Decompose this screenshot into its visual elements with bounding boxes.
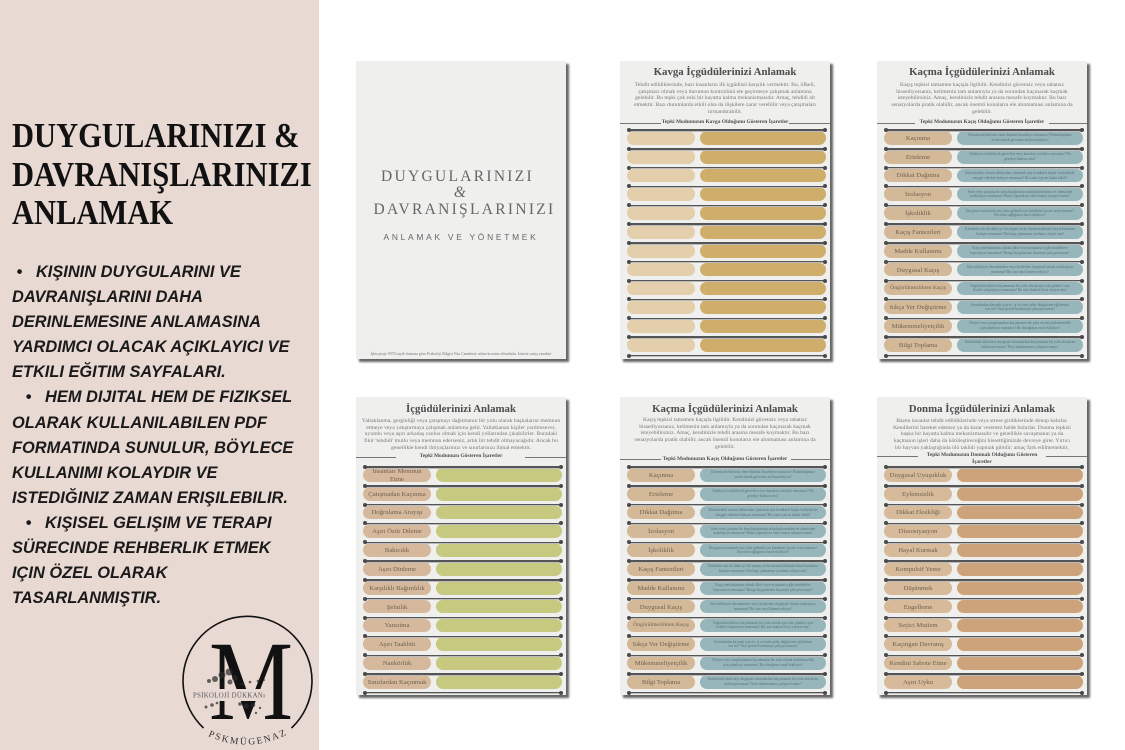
worksheet rows: Duygusal Kaçış — [897, 267, 939, 274]
intro text: Kendilerini hareket edemez ya da karar veremez halde bulurlar. Donma tepkisi — [893, 425, 1071, 431]
worksheet rows: uzaklaşıyor musunuz? Bunu yaparak ne elde etmeyi umuyorsunuz? — [970, 194, 1070, 198]
intro text: gelebilir. — [715, 444, 735, 450]
worksheet rows — [363, 465, 563, 695]
worksheet rows: Bilgi Toplama — [642, 679, 680, 686]
intro text: Tehdit edildiklerinde, bazı insanların ilk içgüdüsü karşılık vermektir. Bu, öfkeli, — [635, 82, 815, 88]
divider heading: Tepki Modunuzun Donmak Olduğunu Gösteren — [927, 452, 1037, 458]
worksheet rows: Düşünmek — [904, 585, 932, 592]
logo flowers — [204, 668, 265, 714]
cover title: DUYGULARINIZI — [381, 168, 534, 184]
left panel — [0, 0, 319, 750]
worksheet rows: Öngörülmezlikten Kaçış — [633, 622, 689, 628]
bullet list: SÜRECINDE REHBERLIK ETMEK — [12, 539, 271, 557]
worksheet rows: Duygusal sorunlarla yüz yüze gelmek için kendinizi işe mi veriyorsunuz? — [709, 546, 817, 550]
main title: DUYGULARINIZI & — [12, 117, 300, 155]
worksheet rows: Dissosiyasyon — [899, 528, 937, 535]
worksheet rows: musunuz? Bu size nasıl hizmet ediyor? — [734, 607, 792, 611]
cover title: & — [454, 184, 468, 201]
logo band — [190, 689, 266, 701]
intro text: çatışmacı olmak veya durumun kontrolünü ele geçirmeye çalışmak anlamına — [638, 89, 812, 95]
worksheet rows: meşgul ederken buluyor musunuz? Bu sizin için ne kadar etkili? — [973, 176, 1067, 180]
worksheet rows: Aşırı Dinleme — [378, 566, 416, 573]
cover footer: İşbu proje 5070 sayılı kanuna göre Psikoloji Bilgisi Nur Candemir adına koruma altındadır. İzinsiz satışı yasaktır — [371, 350, 551, 356]
worksheet rows: Dikkat Dağıtma — [640, 509, 682, 516]
worksheet rows: kullanıyorsunuz? Neyi atlatmamaya çalışıyorsunuz? — [724, 682, 802, 686]
worksheet rows: Kaçınma — [649, 472, 673, 479]
worksheet rows: Aşırı Taahhüt — [379, 641, 415, 648]
worksheet rows: Duygusal Kaçış — [640, 604, 682, 611]
intro text: Yaltaklanma, gerginliği veya çatışmayı dağıtmanın bir yolu olarak başkalarını memnun — [362, 418, 560, 424]
worksheet rows: Doğrulama Arayışı — [371, 509, 423, 516]
logo ring — [183, 616, 312, 728]
worksheet rows: Sorunlardan kaçmak için ev, iş ve hatta şehir değiştirme eğiliminiz — [714, 640, 812, 644]
bullet list: • HEM DIJITAL HEM DE FIZIKSEL — [26, 388, 292, 406]
heading: Kavga İçgüdülerinizi Anlamak — [654, 66, 796, 78]
intro text: uyumlu veya aşırı arkadaş canlısı olmak için kendi yollarından çıkabilirler. Buradaki — [365, 431, 557, 437]
worksheet rows: Stres veya çatışma ile karşılaştığınızda arkadaşlarınızdan ve ailenizden — [968, 190, 1072, 194]
worksheet rows: İnsanları Memnun — [372, 468, 422, 475]
divider heading: Tepki Modunuzun Kaçış Olduğunu Gösteren İşaretler — [920, 119, 1044, 125]
heading: Donma İçgüdülerinizi Anlamak — [909, 403, 1055, 415]
bullet list: DERINLEMESINE ANLAMASINA — [12, 313, 261, 331]
intro text: isteyebilirsiniz. Amaç, kendinizle tehdit arasına mesafe koymaktır. Bu bazı — [897, 95, 1066, 101]
worksheet rows: listeler oluşturuyor musunuz? Bu size kontrol hissi veriyor mu? — [716, 625, 810, 629]
worksheet rows — [627, 128, 827, 358]
worksheet rows: İşkoliklik — [648, 547, 674, 554]
intro text: bir hayvan yaklaştığında ölü taklidi yapmak gibidir; amaç fark edilmemektir, — [895, 445, 1069, 451]
worksheet rows: Tetikleyici olabilecek görevleri veya kararları erteliyor musunuz? Bir — [969, 152, 1071, 156]
worksheet rows: Eylemsizlik — [902, 491, 934, 498]
worksheet rows: Madde Kullanımı — [894, 248, 942, 255]
bullet list: ISTEDIĞINIZ ZAMAN ERIŞILEBILIR. — [12, 489, 288, 507]
bullet list: • KIŞISEL GELIŞIM VE TERAPI — [26, 514, 272, 532]
intro text: etmeye veya yatıştırmaya çalışmak anlamına gelir. Yaltaklanan kişiler yardımsever, — [366, 425, 556, 431]
intro text: senaryolarda pratik olabilir, ancak önemli konuların ele alınmaması anlamına da — [891, 102, 1073, 108]
worksheet rows: Yansıtma — [385, 622, 409, 629]
intro text: Bazen insanlar tehdit edildiklerinde veya strese girdiklerinde donup kalırlar. — [896, 418, 1068, 424]
worksheet rows — [627, 465, 827, 695]
bullet list: OLARAK KULLANILABILEN PDF — [12, 414, 267, 432]
bullet list: • KIŞININ DUYGULARINI VE — [17, 263, 241, 281]
worksheet rows: Bu sizin sağlığınızı nasıl etkiliyor? — [737, 550, 789, 554]
worksheet rows: Sizi tetikleyen durumlardan veya kişilerden duygusal olarak uzaklaşıyor — [967, 265, 1073, 269]
cover title: DAVRANIŞLARINIZI — [373, 201, 556, 218]
bullet list: IÇIN ÖZEL OLARAK — [12, 564, 167, 582]
worksheet rows: buluyor musunuz? Bu başa çıkmanıza yardımcı oluyor mu? — [976, 232, 1064, 236]
intro text — [893, 418, 1071, 451]
worksheet rows: Kaçış mekanizması olarak alkol veya uyuşturucu gibi maddelere — [972, 246, 1068, 250]
worksheet rows: için çabalıyor musunuz? Bu durağınızı nasıl etkiliyor? — [723, 663, 803, 667]
worksheet rows: Eleştiri veya yargılamadan kaçınmanın bir yolu olarak mükemmellik — [969, 321, 1071, 325]
bullet list: DAVRANIŞLARINI DAHA — [12, 288, 203, 306]
worksheet rows: buluyor musunuz? Bu başa çıkmanıza yardımcı oluyor mu? — [719, 569, 807, 573]
cover subtitle: ANLAMAK VE YÖNETMEK — [384, 232, 538, 242]
worksheet rows: Etme — [390, 476, 404, 483]
worksheet rows: musunuz? Bu size nasıl hizmet ediyor? — [991, 270, 1049, 274]
intro text: kaçmanın işleri daha da kötüleştireceğini hissettiğimizde devreye girer. Yırtıcı — [894, 438, 1070, 444]
worksheet rows: Stres veya çatışma ile karşılaştığınızda arkadaşlarınızdan ve ailenizden — [711, 527, 815, 531]
worksheet rows: Erteleme — [906, 154, 930, 161]
intro text: gelebilir. — [972, 109, 992, 115]
worksheet rows: Kaçış Fantezileri — [895, 229, 941, 236]
bullet list: FORMATINDA SUNULUR, BÖYLECE — [12, 439, 293, 457]
worksheet rows: Kendinizi sık sık daha iyi bir yaşam ya da durum hakkında hayal kurarken — [708, 564, 818, 568]
worksheet rows — [884, 128, 1084, 358]
intro text: isteyebilirsiniz. Amaç, kendinizle tehdit arasına mesafe koymaktır. Bu bazı — [640, 430, 810, 436]
worksheet rows: Dikkat Dağıtma — [897, 172, 939, 179]
page: donma — [877, 397, 1087, 695]
worksheet rows: Kendinizi sık sık daha iyi bir yaşam ya da durum hakkında hayal kurarken — [965, 227, 1075, 231]
worksheet rows: İzolasyon — [648, 528, 674, 535]
worksheet rows: Sizi tetikleyen durumlardan veya kişilerden duygusal olarak uzaklaşıyor — [710, 602, 816, 606]
worksheet rows: Mükemmeliyetçilik — [635, 660, 687, 667]
intro text — [634, 417, 816, 450]
bullet list: YARDIMCI OLACAK AÇIKLAYICI VE — [12, 338, 289, 356]
main title: DAVRANIŞLARINIZI — [12, 156, 312, 194]
page: kaçma top — [877, 61, 1087, 359]
worksheet rows: uzaklaşıyor musunuz? Bunu yaparak ne elde etmeyi umuyorsunuz? — [713, 531, 813, 535]
divider heading: Tepki Modunuzun Kaçış Olduğunu Gösteren İşaretler — [663, 456, 787, 462]
worksheet rows: Sınırlardan Kaçınmak — [368, 679, 426, 686]
worksheet rows: Karşılıklı Bağımlılık — [369, 585, 425, 592]
bullet list: TASARLANMIŞTIR. — [12, 589, 161, 607]
worksheet rows: Mükemmeliyetçilik — [892, 323, 944, 330]
worksheet rows: Öngörülmezlikten kaçınmanın bir yolu olarak aşırı sıkı planlar veya — [970, 284, 1070, 288]
worksheet rows: gerekçe buluyor mu? — [747, 494, 779, 498]
intro text: fikir 'tehdidi' mutlu veya memnun ederseniz, artık bir tehdit olmayacağıdır. Ancak bu — [364, 438, 558, 444]
main title — [12, 117, 312, 232]
worksheet rows: yerde olmak güvensiz mi hissettiriyor? — [991, 138, 1049, 142]
worksheet rows: Bu sizin sağlığınızı nasıl etkiliyor? — [994, 213, 1046, 217]
worksheet rows: başvuruyor musunuz? Hangi duygulardan kaçmaya çalışıyorsunuz? — [970, 251, 1070, 255]
worksheet rows: Kaçış Fantezileri — [638, 566, 684, 573]
worksheet rows: gerekçe buluyor mu? — [1004, 157, 1036, 161]
worksheet rows: İşkoliklik — [905, 210, 931, 217]
worksheet rows: Aşırı Özür Dileme — [372, 528, 422, 535]
cover title — [373, 168, 556, 218]
main title: ANLAMAK — [12, 194, 173, 232]
worksheet rows: Öngörülmezlikten Kaçış — [890, 285, 946, 291]
worksheet rows: Kaçıngan Davranış — [892, 641, 944, 648]
intro text: genellikle kendi ihtiyaçlarınızı ve sınırlarınızı ihmal etmektir. — [391, 445, 531, 451]
worksheet rows: Sorunlardan kaçmak için ev, iş ve hatta şehir değiştirme eğiliminiz — [971, 303, 1069, 307]
worksheet rows: İzolasyon — [905, 191, 931, 198]
worksheet rows: için çabalıyor musunuz? Bu durağınızı nasıl etkiliyor? — [980, 326, 1060, 330]
worksheet rows: Zihninizdeki sorunu aklınızdan çıkarmak için kendinizi başka faaliyetlerle — [965, 171, 1075, 175]
page: cover — [356, 61, 566, 359]
worksheet rows: Madde Kullanımı — [637, 585, 685, 592]
logo — [182, 616, 313, 744]
logo shop name: PSİKOLOJİ DÜKKANı — [193, 692, 265, 700]
worksheet rows: Sıkça Yer Değiştirme — [889, 304, 947, 311]
bullet list: ETKILI EĞITIM SAYFALARI. — [12, 363, 226, 381]
worksheet rows: kullanıyorsunuz? Neyi atlatmamaya çalışıyorsunuz? — [981, 345, 1059, 349]
intro text: Kaçış tepkisi tamamen kaçışla ilgilidir. Kendinizi güvensiz veya rahatsız — [900, 82, 1064, 88]
page: içgüdüler — [356, 397, 566, 695]
worksheet rows: Sıkça Yer Değiştirme — [632, 641, 690, 648]
worksheet rows: Şefatlık — [387, 604, 407, 611]
worksheet rows: var mı? Neyi geride bırakmaya çalışıyorsunuz? — [728, 644, 798, 648]
worksheet rows: Entelektüel aktiviteyi duygusal sıkıntılardan kaçınmanın bir yolu olarak mı — [708, 677, 818, 681]
worksheet rows: Zihninizdeki sorunu aklınızdan çıkarmak için kendinizi başka faaliyetlerle — [708, 508, 818, 512]
page: kavga — [620, 61, 830, 359]
worksheet rows: Öngörülmezlikten kaçınmanın bir yolu olarak aşırı sıkı planlar veya — [713, 621, 813, 625]
intro text — [891, 82, 1073, 115]
worksheet rows: Bakıcılık — [385, 547, 409, 554]
heading: Kaçma İçgüdülerinizi Anlamak — [652, 403, 798, 415]
intro text: başka bir hayatta kalma mekanizmasıdır ve genellikle savaşmanın ya da — [901, 431, 1063, 437]
worksheet rows: Aşırı Uyku — [903, 679, 933, 686]
worksheet rows: meşgul ederken buluyor musunuz? Bu sizin için ne kadar etkili? — [716, 513, 810, 517]
intro text: gelebilir. Bu tepki çok eski bir hayatta kalma mekanizmasıdır. Amaç, tehdidi alt — [635, 95, 815, 101]
worksheet rows: Seçici Mutizm — [898, 622, 938, 629]
page: donma: İşaretler — [972, 459, 992, 465]
worksheet rows: Bilgi Toplama — [899, 342, 937, 349]
intro text: etmektir. Bazı durumlarda etkili olsa da ilişkilere zarar verebilir veya çatışmaları — [634, 102, 816, 108]
worksheet rows: Duygusal Uyuşukluk — [890, 472, 946, 479]
worksheet rows: Hayal Kurmak — [898, 547, 938, 554]
divider heading: Tepki Modunuzu Gösteren İşaretler — [420, 453, 502, 459]
worksheet rows: Kompulsif Yeme — [895, 566, 941, 573]
logo letter M: M — [209, 619, 293, 744]
bullet list — [12, 263, 294, 607]
worksheet rows: Çatışmadan Kaçınma — [368, 491, 426, 498]
heading: Kaçma İçgüdülerinizi Anlamak — [909, 66, 1055, 78]
divider heading: Tepki Modunuzun Kavga Olduğunu Gösteren İşaretler — [662, 119, 788, 125]
worksheet rows: Nankörlük — [383, 660, 411, 667]
worksheet rows: yerde olmak güvensiz mi hissettiriyor? — [734, 475, 792, 479]
worksheet rows: Tetikleyici olabilecek görevleri veya kararları erteliyor musunuz? Bir — [712, 489, 814, 493]
worksheet rows: Durumu derhal terk etme dürtüsü hissediyor musunuz? Bulunduğunuz — [711, 470, 815, 474]
worksheet rows: var mı? Neyi geride bırakmaya çalışıyorsunuz? — [985, 307, 1055, 311]
worksheet rows: Dikkat Eksikliği — [896, 509, 940, 516]
logo curved name: PSKMÜGENAZ — [208, 730, 286, 744]
worksheet rows: Kaçınma — [906, 135, 930, 142]
worksheet rows: Entelektüel aktiviteyi duygusal sıkıntılardan kaçınmanın bir yolu olarak mı — [965, 340, 1075, 344]
worksheet rows: Engelleme — [904, 604, 932, 611]
intro text: Kaçış tepkisi tamamen kaçışla ilgilidir. Kendinizi güvensiz veya rahatsız — [643, 417, 807, 423]
worksheet rows — [884, 465, 1084, 695]
worksheet rows: Kendini Sabote Etme — [889, 660, 947, 667]
intro text: tırmandırabilir. — [708, 109, 742, 115]
intro text — [362, 418, 560, 451]
heading: İçgüdülerinizi Anlamak — [406, 403, 516, 415]
intro text: hissediyorsanız, kelimenin tam anlamıyla ya da sorundan kaçınarak kaçmak — [896, 89, 1068, 95]
intro text: hissediyorsanız, kelimenin tam anlamıyla ya da sorundan kaçınarak kaçmak — [639, 424, 811, 430]
worksheet rows: Erteleme — [649, 491, 673, 498]
bullet list: KULLANIMI KOLAYDIR VE — [12, 464, 217, 482]
divider heading — [877, 452, 1087, 465]
page: kaçma bottom — [620, 397, 830, 695]
worksheet rows: listeler oluşturuyor musunuz? Bu size kontrol hissi veriyor mu? — [973, 288, 1067, 292]
worksheet rows: Durumu derhal terk etme dürtüsü hissediyor musunuz? Bulunduğunuz — [968, 133, 1072, 137]
worksheet rows: Duygusal sorunlarla yüz yüze gelmek için kendinizi işe mi veriyorsunuz? — [966, 209, 1074, 213]
intro text — [634, 82, 816, 115]
intro text: senaryolarda pratik olabilir, ancak önemli konuların ele alınmaması anlamına da — [634, 437, 816, 443]
worksheet rows: Eleştiri veya yargılamadan kaçınmanın bir yolu olarak mükemmellik — [712, 658, 814, 662]
worksheet rows: başvuruyor musunuz? Hangi duygulardan kaçmaya çalışıyorsunuz? — [713, 588, 813, 592]
worksheet rows: Kaçış mekanizması olarak alkol veya uyuşturucu gibi maddelere — [715, 583, 811, 587]
